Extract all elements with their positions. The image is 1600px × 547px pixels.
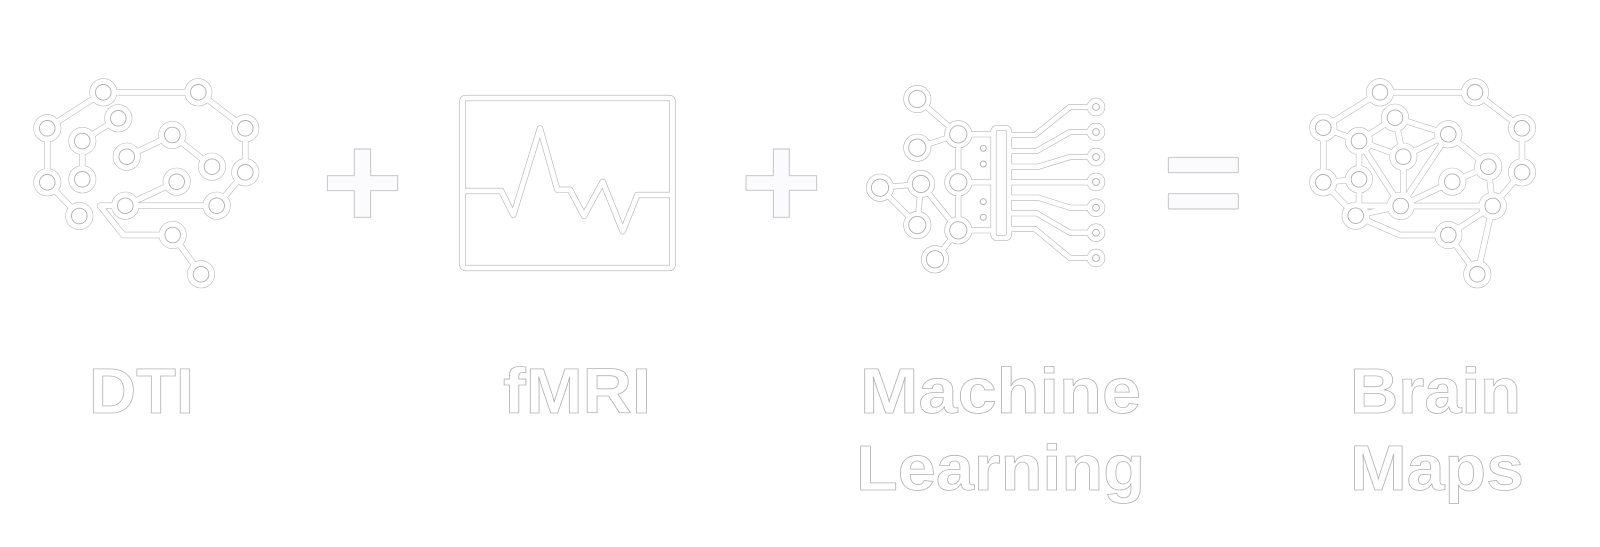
label: Machine Learning: Machine bbox=[860, 355, 1141, 427]
icon: brain map network bbox=[1312, 82, 1533, 285]
icon: equals sign bbox=[1168, 157, 1238, 209]
label: fMRI: fMRI bbox=[503, 355, 651, 427]
icon: fMRI signal monitor bbox=[462, 98, 672, 268]
label: Brain Maps: Maps bbox=[1350, 432, 1524, 504]
label: Machine Learning bbox=[856, 355, 1145, 504]
label: DTI: DTI bbox=[89, 355, 194, 427]
icon: DTI brain network bbox=[36, 82, 256, 285]
icon: plus sign two bbox=[746, 149, 817, 217]
label: Brain Maps: Brain bbox=[1350, 355, 1521, 427]
label: Brain Maps bbox=[1350, 355, 1524, 504]
label: Machine Learning: Learning bbox=[856, 432, 1145, 504]
icon: plus sign one bbox=[327, 149, 398, 217]
icon: machine learning circuit chip bbox=[869, 88, 1102, 270]
